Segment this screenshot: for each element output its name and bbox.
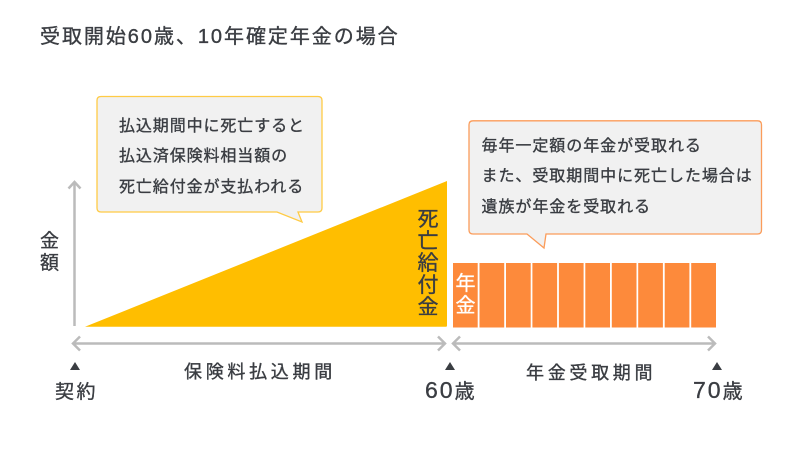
y axis arrow [68, 182, 80, 326]
death benefit label: 金 [418, 296, 438, 319]
title: 受取開始60歳、10年確定年金の場合 [40, 25, 400, 48]
death benefit label: 付 [418, 274, 438, 297]
pension label: 金 [456, 294, 476, 317]
death benefit label [418, 208, 438, 319]
y axis label [40, 230, 59, 274]
label: age 70: 70歳 [693, 377, 743, 403]
callout: pension payment [469, 121, 762, 248]
callout text: 払込期間中に死亡すると [119, 117, 305, 135]
marker: age 70 [712, 362, 722, 370]
label: contract: 契約 [55, 381, 98, 403]
callout text [482, 137, 753, 216]
y axis label: 金 [40, 230, 59, 252]
arrow: pension receipt period [453, 336, 715, 350]
callout text: 死亡給付金が支払われる [119, 178, 304, 196]
callout text: 払込済保険料相当額の [119, 147, 288, 165]
death benefit label: 死 [418, 208, 438, 231]
label: premium payment period: 保険料払込期間 [184, 362, 336, 382]
callout text: 遺族が年金を受取れる [482, 198, 651, 216]
marker: age 60 [445, 362, 455, 370]
pension label: 年 [456, 272, 476, 295]
callout: death during payment period [97, 96, 322, 222]
callout text: また、受取期間中に死亡した場合は [482, 167, 753, 185]
pension blocks [453, 263, 716, 328]
callout text: 毎年一定額の年金が受取れる [482, 137, 702, 155]
death benefit triangle [85, 181, 447, 327]
y axis label: 額 [40, 252, 59, 274]
label: pension receipt period: 年金受取期間 [526, 363, 656, 383]
pension label [456, 272, 476, 317]
label: age 60: 60歳 [425, 377, 475, 403]
marker: contract [70, 362, 80, 370]
death benefit label: 亡 [418, 230, 438, 253]
death benefit label: 給 [418, 252, 438, 275]
arrow: premium payment period [73, 336, 445, 350]
callout text [119, 117, 305, 196]
